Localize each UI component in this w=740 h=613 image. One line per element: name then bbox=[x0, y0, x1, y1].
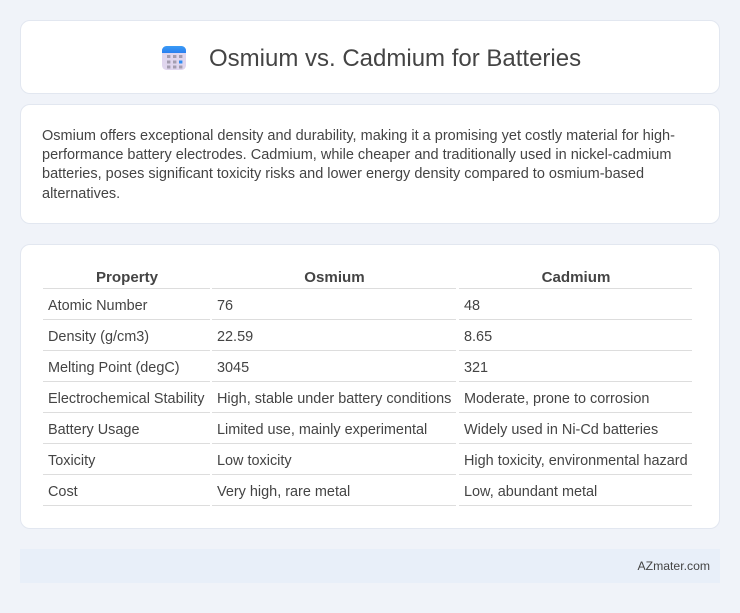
table headers: Cadmium bbox=[542, 269, 610, 286]
row: melting point: 3045 bbox=[217, 360, 249, 376]
footer bar bbox=[20, 549, 720, 583]
row: electrochemical stability: High, stable under battery conditions bbox=[217, 391, 451, 407]
footer credit: AZmater.com bbox=[638, 559, 710, 573]
table headers: Osmium bbox=[304, 269, 365, 286]
row: melting point bbox=[43, 350, 692, 376]
row: cost bbox=[43, 474, 692, 506]
summary text: batteries, poses significant toxicity risks and lower energy density compared to osmium-based bbox=[42, 166, 644, 182]
summary text: Osmium offers exceptional density and durability, making it a promising yet costly material for high- bbox=[42, 128, 675, 144]
row: density: 22.59 bbox=[217, 329, 253, 345]
row: battery usage bbox=[43, 412, 692, 438]
row: electrochemical stability bbox=[43, 381, 692, 407]
summary text bbox=[42, 128, 675, 202]
row: cost: Low, abundant metal bbox=[464, 484, 597, 500]
panel: comparison table bbox=[20, 244, 720, 529]
row: atomic number: 76 bbox=[217, 298, 233, 314]
row: melting point: 321 bbox=[464, 360, 488, 376]
panel: title card bbox=[20, 20, 720, 94]
row: atomic number: 48 bbox=[464, 298, 480, 314]
row: cost: Very high, rare metal bbox=[217, 484, 350, 500]
row: toxicity: Toxicity bbox=[48, 453, 95, 469]
row: cost: Cost bbox=[48, 484, 78, 500]
row: battery usage: Widely used in Ni-Cd batteries bbox=[464, 422, 658, 438]
table headers bbox=[96, 269, 610, 286]
table headers: Property bbox=[96, 269, 158, 286]
row: density bbox=[43, 319, 692, 345]
row: density: 8.65 bbox=[464, 329, 492, 345]
icon: calendar bbox=[162, 46, 186, 70]
summary text: performance battery electrodes. Cadmium, while cheaper and traditionally used in nickel-cadmium bbox=[42, 147, 671, 163]
row: battery usage: Battery Usage bbox=[48, 422, 139, 438]
row: electrochemical stability: Moderate, prone to corrosion bbox=[464, 391, 649, 407]
row: density: Density (g/cm3) bbox=[48, 329, 149, 345]
row: melting point: Melting Point (degC) bbox=[48, 360, 180, 376]
row: toxicity: High toxicity, environmental hazard bbox=[464, 453, 688, 469]
row: atomic number: Atomic Number bbox=[48, 298, 147, 314]
row: battery usage: Limited use, mainly experimental bbox=[217, 422, 427, 438]
row: toxicity: Low toxicity bbox=[217, 453, 292, 469]
row: electrochemical stability: Electrochemical Stability bbox=[48, 391, 204, 407]
row: toxicity bbox=[43, 443, 692, 469]
summary text: alternatives. bbox=[42, 186, 120, 202]
title: Osmium vs. Cadmium for Batteries bbox=[209, 45, 581, 72]
row: atomic number bbox=[43, 288, 692, 314]
panel: summary bbox=[20, 104, 720, 224]
